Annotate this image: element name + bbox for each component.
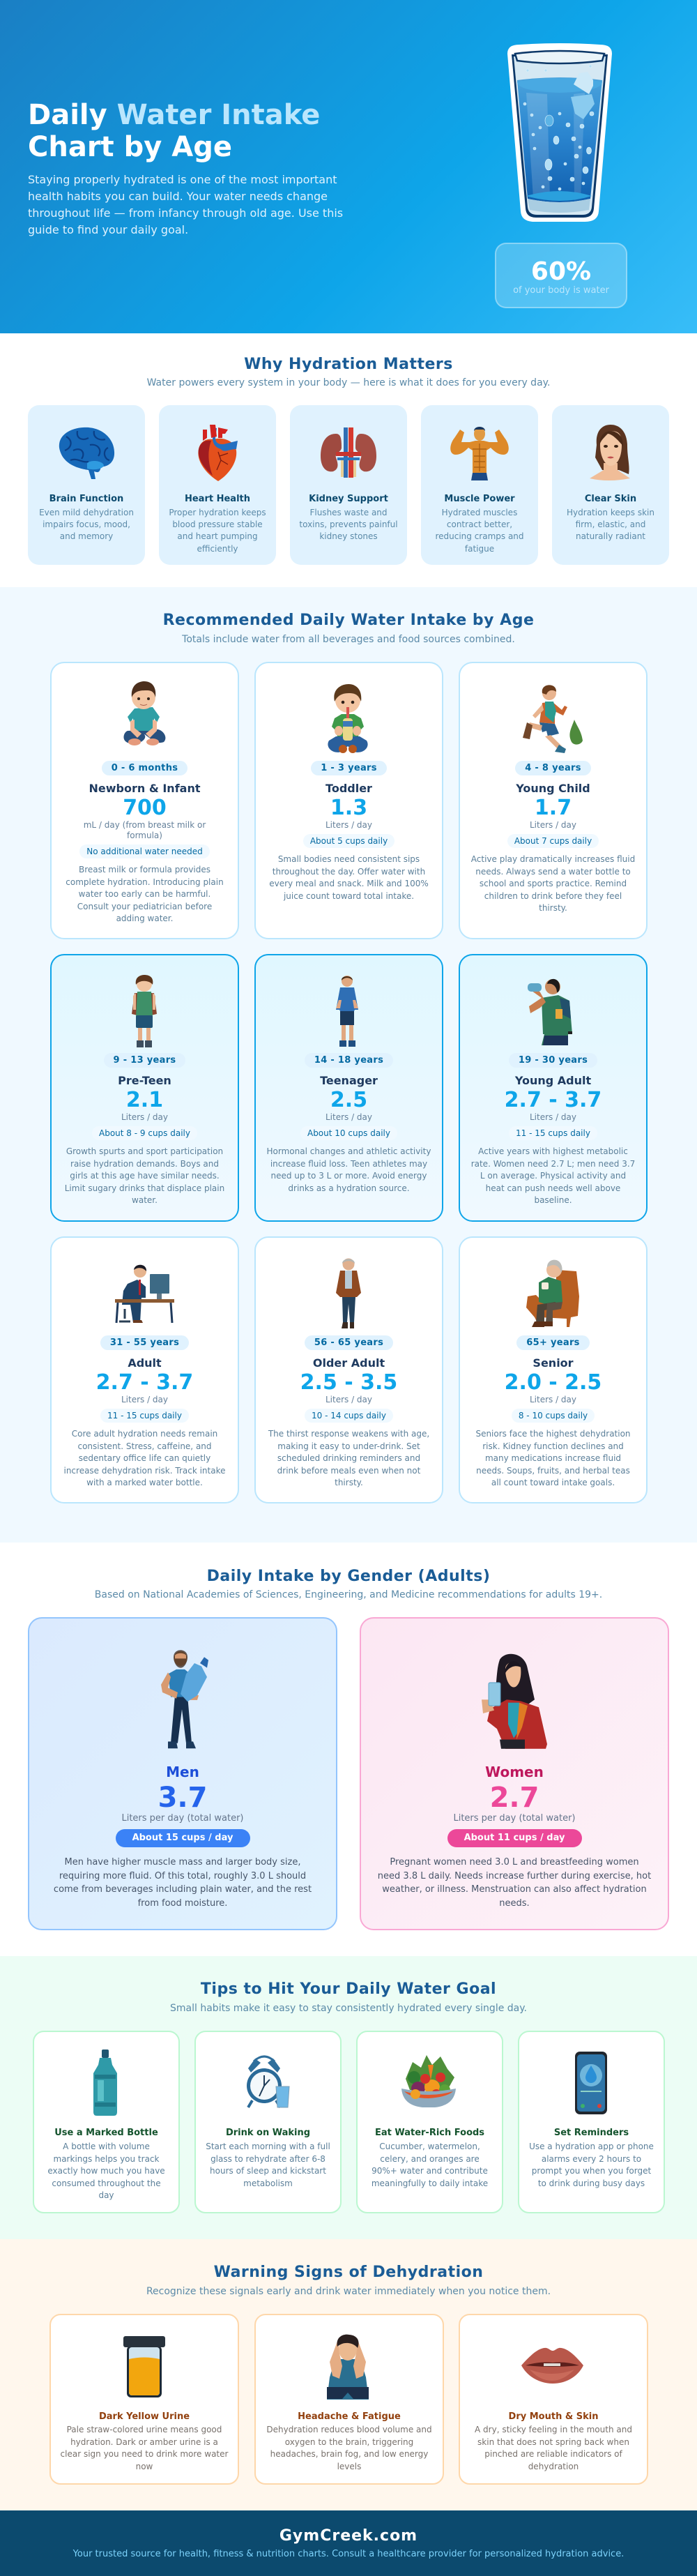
card: senior <box>459 1236 648 1503</box>
card content: 19 - 30 years <box>519 1055 588 1066</box>
card: dry mouth and skin: pinched are reliable indicators of <box>484 2449 622 2459</box>
hero description: guide to find your daily goal. <box>28 223 188 236</box>
card: dry mouth and skin: Dry Mouth & Skin <box>509 2411 598 2422</box>
card content: The thirst response weakens with age, <box>268 1429 429 1439</box>
card: brain function: Even mild dehydration <box>39 508 134 517</box>
card content: 31 - 55 years <box>110 1338 179 1348</box>
card content: Young Child <box>516 782 590 795</box>
card: dry mouth and skin: dehydration <box>528 2462 579 2471</box>
card content: 1.3 <box>330 796 367 820</box>
card content: 2.7 - 3.7 <box>505 1088 602 1112</box>
card content: 2.1 <box>126 1088 163 1112</box>
card: kidney support: toxins, prevents painful <box>299 520 398 529</box>
card content: Liters / day <box>325 820 372 830</box>
icon: glass of water <box>507 43 612 222</box>
card content: 10 - 14 cups daily <box>312 1411 386 1420</box>
footer brand: GymCreek.com <box>279 2527 418 2545</box>
hero section <box>0 0 697 333</box>
illustration: man at desk <box>115 1265 174 1324</box>
card: clear skin: firm, elastic, and <box>576 520 645 529</box>
illustration: older man standing <box>336 1258 361 1328</box>
card: dark yellow urine <box>49 2314 239 2485</box>
card content: Active play dramatically increases fluid <box>471 854 635 864</box>
icon: bowl of vegetables <box>401 2055 456 2107</box>
card: women <box>360 1617 669 1930</box>
card: kidney support <box>290 405 407 565</box>
card: muscle power: fatigue <box>465 544 494 554</box>
card content: Limit sugary drinks that displace plain <box>65 1183 224 1192</box>
card: set reminders: prompt you when you forget <box>532 2166 651 2176</box>
card content: Growth spurts and sport participation <box>66 1146 223 1156</box>
card content: Senior <box>533 1356 574 1370</box>
card content: Liters / day <box>325 1395 372 1404</box>
illustration: man drinking <box>528 979 572 1045</box>
card content <box>54 1764 312 1909</box>
icon: water bottle <box>93 2050 117 2116</box>
subheading: Water powers every system in your body — here is what it does for you every day. <box>147 377 550 388</box>
card content <box>471 1055 635 1205</box>
card: water-rich foods <box>356 2031 503 2213</box>
card: older adult <box>254 1236 443 1503</box>
card: adult <box>50 1236 239 1503</box>
card: heart health: Heart Health <box>185 494 250 504</box>
card content: consistent. Stress, caffeine, and <box>77 1441 212 1450</box>
card: headache and fatigue: levels <box>337 2462 361 2471</box>
card content: school and sports practice. Remind <box>480 879 627 888</box>
card content: 4 - 8 years <box>525 763 581 773</box>
card content: many medications increase fluid <box>485 1453 621 1463</box>
card content: increase fluid loss. Teen athletes may <box>270 1159 427 1169</box>
card content: water too early can be harmful. <box>79 889 210 899</box>
card: water-rich foods: celery, and oranges are <box>380 2153 480 2163</box>
heading: Why Hydration Matters <box>244 356 453 373</box>
card content: drink before meals even when not <box>277 1466 420 1476</box>
panel: tips <box>0 1956 697 2239</box>
card content: 2.5 <box>330 1088 367 1112</box>
card: heart health: and heart pumping <box>177 531 258 541</box>
card content: 11 - 15 cups daily <box>107 1411 182 1420</box>
card: kidney support: Kidney Support <box>309 494 388 504</box>
card content <box>471 761 635 913</box>
card content: Liters per day (total water) <box>121 1813 244 1824</box>
card: drink on waking: Drink on Waking <box>226 2128 310 2138</box>
card: clear skin: naturally radiant <box>576 531 645 541</box>
illustration: woman drinking water <box>482 1654 547 1749</box>
card content: Pre-Teen <box>118 1074 171 1087</box>
card: dry mouth and skin: A dry, sticky feeling in the mouth and <box>475 2425 632 2434</box>
card: marked bottle: Use a Marked Bottle <box>54 2128 158 2138</box>
card content: water. <box>132 1195 158 1205</box>
footer note: Your trusted source for health, fitness & nutrition charts. Consult a healthcare provider for personalized hydration advice. <box>73 2549 624 2559</box>
card: kidney support: Flushes waste and <box>309 508 388 517</box>
card: toddler <box>254 662 443 939</box>
card content: needs. <box>499 1898 530 1909</box>
stat label: of your body is water <box>513 285 609 296</box>
hero title: Chart by Age <box>28 131 232 163</box>
card: muscle power <box>421 405 538 565</box>
card content: Adult <box>128 1356 162 1370</box>
card: brain function: impairs focus, mood, <box>43 520 130 529</box>
card content: girls at this age have similar needs. <box>70 1171 220 1181</box>
card: marked bottle: day <box>98 2190 114 2200</box>
card content: juice count toward total intake. <box>284 891 414 901</box>
heading: Tips to Hit Your Daily Water Goal <box>201 1980 496 1998</box>
card content: 14 - 18 years <box>314 1055 383 1066</box>
card content: 65+ years <box>526 1338 580 1348</box>
icon: smartphone with water drop <box>575 2052 607 2114</box>
card: drink on waking: glass to rehydrate after 6-8 <box>210 2153 325 2163</box>
card content: About 7 cups daily <box>514 836 592 846</box>
card content: Young Adult <box>515 1074 591 1087</box>
card content: 2.5 - 3.5 <box>300 1370 397 1395</box>
card: dark yellow urine: hydration. Dark or amber urine is a <box>70 2437 218 2446</box>
card: young adult <box>459 954 648 1222</box>
card content: Liters / day <box>530 820 576 830</box>
heading: Warning Signs of Dehydration <box>214 2264 483 2281</box>
card: water-rich foods: 90%+ water and contribute <box>372 2166 488 2176</box>
card content: Women <box>485 1764 544 1780</box>
card content <box>269 761 429 901</box>
card: marked bottle: A bottle with volume <box>63 2142 150 2151</box>
card content <box>378 1764 651 1909</box>
card content: Breast milk or formula provides <box>79 865 210 874</box>
stat value: 60% <box>531 257 591 286</box>
card content: Liters per day (total water) <box>453 1813 576 1824</box>
card content: need up to 3 L or more. Avoid energy <box>270 1171 427 1181</box>
card content: adding water. <box>116 914 173 923</box>
card content: thirsty. <box>539 903 567 913</box>
card: headache and fatigue: Dehydration reduces blood volume and <box>266 2425 432 2434</box>
card content: requiring more fluid. Of this total, roughly 3.0 L should <box>59 1871 306 1881</box>
card: set reminders: alarms every 2 hours to <box>542 2153 641 2163</box>
icon: brain <box>59 427 114 479</box>
card content: Newborn & Infant <box>89 782 200 795</box>
card content: come from beverages including plain water, and the rest <box>54 1884 312 1895</box>
panel: recommended intake by age <box>0 587 697 1543</box>
card content: 0 - 6 months <box>112 763 178 773</box>
footer <box>0 2510 697 2576</box>
card: set reminders: to drink during busy days <box>538 2179 645 2188</box>
card content: rate. Women need 2.7 L; men need 3.7 <box>471 1159 635 1169</box>
card: clear skin <box>552 405 669 565</box>
illustration: running child <box>523 685 583 753</box>
subheading: Recognize these signals early and drink water immediately when you notice them. <box>146 2286 551 2297</box>
card: water-rich foods: meaningfully to daily intake <box>372 2179 488 2188</box>
hero title <box>28 99 320 163</box>
card content <box>475 1335 631 1487</box>
card content <box>65 1055 224 1205</box>
card: headache and fatigue: oxygen to the brain, triggering <box>285 2437 413 2446</box>
hero description <box>28 173 343 236</box>
card content: Liters / day <box>530 1112 576 1122</box>
card content: risk. Kidney function declines and <box>482 1441 624 1450</box>
card: heart health: blood pressure stable <box>172 520 263 529</box>
card: drink on waking <box>194 2031 342 2213</box>
card content: baseline. <box>534 1195 572 1205</box>
card content: scheduled drinking reminders and <box>277 1453 420 1463</box>
card content: Hormonal changes and athletic activity <box>267 1146 431 1156</box>
card content <box>66 761 224 923</box>
card content: About 8 - 9 cups daily <box>99 1128 190 1138</box>
card: kidney support: kidney stones <box>319 531 378 541</box>
card content <box>268 1335 429 1487</box>
card: drink on waking: hours of sleep and kickstart <box>210 2166 326 2176</box>
card content: thirsty. <box>335 1478 363 1487</box>
card content: sedentary office life can quietly <box>79 1453 210 1463</box>
card content: from food moisture. <box>138 1898 227 1909</box>
subheading: Small habits make it easy to stay consistently hydrated every single day. <box>170 2003 527 2014</box>
card content: Men have higher muscle mass and larger body size, <box>65 1857 300 1867</box>
card content: About 5 cups daily <box>310 836 388 846</box>
card content: Older Adult <box>313 1356 385 1370</box>
card: clear skin: Clear Skin <box>585 494 636 504</box>
illustration: senior in armchair <box>526 1259 579 1327</box>
card content: Core adult hydration needs remain <box>72 1429 217 1439</box>
card content: weather, or illness. Menstruation can also affect hydration <box>382 1884 647 1895</box>
card: water-rich foods: Eat Water-Rich Foods <box>375 2128 484 2138</box>
card: heart health <box>159 405 276 565</box>
card content: all count toward intake goals. <box>491 1478 615 1487</box>
card content: 3.7 <box>158 1782 207 1814</box>
card content: Active years with highest metabolic <box>478 1146 628 1156</box>
card content <box>267 1055 431 1192</box>
card: pre-teen <box>50 954 239 1222</box>
panel: warning signs <box>0 2239 697 2510</box>
card: dark yellow urine: Pale straw-colored urine means good <box>67 2425 222 2434</box>
card: men <box>28 1617 337 1930</box>
icon: heart <box>198 425 238 481</box>
card content: 1 - 3 years <box>321 763 377 773</box>
card content: raise hydration demands. Boys and <box>70 1159 219 1169</box>
card content: heat can push needs well above <box>486 1183 620 1192</box>
icon: man holding head <box>327 2335 369 2400</box>
card content: 2.7 <box>490 1782 539 1814</box>
card: dark yellow urine: Dark Yellow Urine <box>99 2411 190 2422</box>
card content <box>63 1335 226 1487</box>
card content: Liters / day <box>121 1395 168 1404</box>
card content: Small bodies need consistent sips <box>278 854 420 864</box>
card content: throughout the day. Offer water with <box>273 866 425 876</box>
card: heart health: Proper hydration keeps <box>169 508 266 517</box>
card content: formula) <box>127 831 162 840</box>
card content: 1.7 <box>535 796 572 820</box>
heading: Recommended Daily Water Intake by Age <box>163 612 534 629</box>
card content: needs. Soups, fruits, and herbal teas <box>476 1466 630 1476</box>
card: drink on waking: Start each morning with a full <box>206 2142 330 2151</box>
card: set reminders: Set Reminders <box>554 2128 629 2138</box>
card content: with a marked water bottle. <box>86 1478 203 1487</box>
card content: 2.0 - 2.5 <box>505 1370 602 1395</box>
card content: complete hydration. Introducing plain <box>66 877 224 887</box>
card content: Liters / day <box>121 1112 168 1122</box>
card: young child <box>459 662 648 939</box>
card content: Consult your pediatrician before <box>77 901 212 911</box>
card: brain function: and memory <box>60 531 113 541</box>
card: muscle power: reducing cramps and <box>435 531 524 541</box>
card: dry mouth and skin: skin that does not spring back when <box>477 2437 629 2446</box>
card content: mL / day (from breast milk or <box>84 820 206 830</box>
card content: Men <box>166 1764 199 1780</box>
icon: alarm clock and glass <box>247 2055 290 2108</box>
stat box: 60 percent <box>495 243 627 308</box>
icon: muscular man <box>450 427 509 480</box>
card: teenager <box>254 954 443 1222</box>
card content: Teenager <box>320 1074 378 1087</box>
card content: Pregnant women need 3.0 L and breastfeeding women <box>390 1857 639 1867</box>
card: muscle power: contract better, <box>447 520 512 529</box>
card: brain function: Brain Function <box>49 494 123 504</box>
illustration: toddler with bottle <box>328 684 368 753</box>
card content: Liters / day <box>325 1112 372 1122</box>
card: marked bottle <box>33 2031 180 2213</box>
hero description: Staying properly hydrated is one of the most important <box>28 173 337 186</box>
card content: increase dehydration risk. Track intake <box>63 1466 226 1476</box>
card: headache and fatigue: Headache & Fatigue <box>298 2411 401 2422</box>
card content: drinks as a hydration source. <box>288 1183 410 1192</box>
card: muscle power: Muscle Power <box>444 494 515 504</box>
illustration: standing teen <box>336 976 358 1047</box>
card content: About 11 cups / day <box>464 1833 565 1843</box>
illustration: boy with backpack <box>132 975 157 1047</box>
subheading: Totals include water from all beverages and food sources combined. <box>182 634 515 645</box>
icon: lips <box>521 2347 583 2384</box>
card: brain function <box>28 405 145 565</box>
card: set reminders <box>518 2031 665 2213</box>
card content: every meal and snack. Milk and 100% <box>269 879 429 888</box>
card content: 2.7 - 3.7 <box>96 1370 193 1395</box>
card: set reminders: Use a hydration app or phone <box>529 2142 654 2151</box>
card content: making it easy to under-drink. Set <box>277 1441 420 1450</box>
icon: woman face <box>590 425 630 480</box>
hero description: health habits you can build. Your water needs change <box>28 190 328 203</box>
card: newborn and infant <box>50 662 239 939</box>
card content: Toddler <box>325 782 372 795</box>
card content: Seniors face the highest dehydration <box>475 1429 631 1439</box>
card content: needs. Always send a water bottle to <box>475 866 631 876</box>
heading: Daily Intake by Gender (Adults) <box>207 1568 490 1585</box>
icon: sample jar <box>123 2336 165 2397</box>
hero description: throughout life — from infancy through old age. Use this <box>28 206 343 220</box>
card: headache and fatigue <box>254 2314 444 2485</box>
card content: 700 <box>123 796 167 820</box>
illustration: man holding water bottle <box>161 1650 208 1749</box>
card: drink on waking: metabolism <box>243 2179 293 2188</box>
card content: need 3.8 L daily. Needs increase further during exercise, hot <box>378 1871 651 1881</box>
card: headache and fatigue: headaches, brain fog, and low energy <box>270 2449 428 2459</box>
card: dark yellow urine: clear sign you need to drink more water <box>61 2449 228 2459</box>
card content: L on average. Physical activity and <box>480 1171 626 1181</box>
card content: children to drink before they feel <box>484 891 622 901</box>
card: marked bottle: consumed throughout the <box>52 2179 161 2188</box>
card: dark yellow urine: now <box>136 2462 153 2471</box>
card content: About 15 cups / day <box>132 1833 233 1843</box>
card: dry mouth and skin <box>459 2314 648 2485</box>
panel: daily intake by gender <box>0 1543 697 1956</box>
card: clear skin: Hydration keeps skin <box>567 508 654 517</box>
card content: 11 - 15 cups daily <box>516 1128 590 1138</box>
card content: 9 - 13 years <box>114 1055 176 1066</box>
card content: 8 - 10 cups daily <box>519 1411 588 1420</box>
illustration: seated baby <box>124 681 166 745</box>
card: muscle power: Hydrated muscles <box>442 508 517 517</box>
card: heart health: efficiently <box>197 544 238 554</box>
hero title: Daily Water Intake <box>28 99 320 131</box>
icon: kidneys <box>321 427 376 478</box>
card content: No additional water needed <box>86 847 203 856</box>
card: marked bottle: exactly how much you have <box>47 2166 165 2176</box>
card content: Liters / day <box>530 1395 576 1404</box>
card content: 56 - 65 years <box>314 1338 383 1348</box>
subheading: Based on National Academies of Sciences, Engineering, and Medicine recommendations for adults 19+. <box>95 1589 602 1600</box>
card: marked bottle: markings helps you track <box>54 2153 159 2163</box>
card content: About 10 cups daily <box>307 1128 390 1138</box>
card: water-rich foods: Cucumber, watermelon, <box>379 2142 480 2151</box>
panel: why hydration matters <box>0 333 697 587</box>
